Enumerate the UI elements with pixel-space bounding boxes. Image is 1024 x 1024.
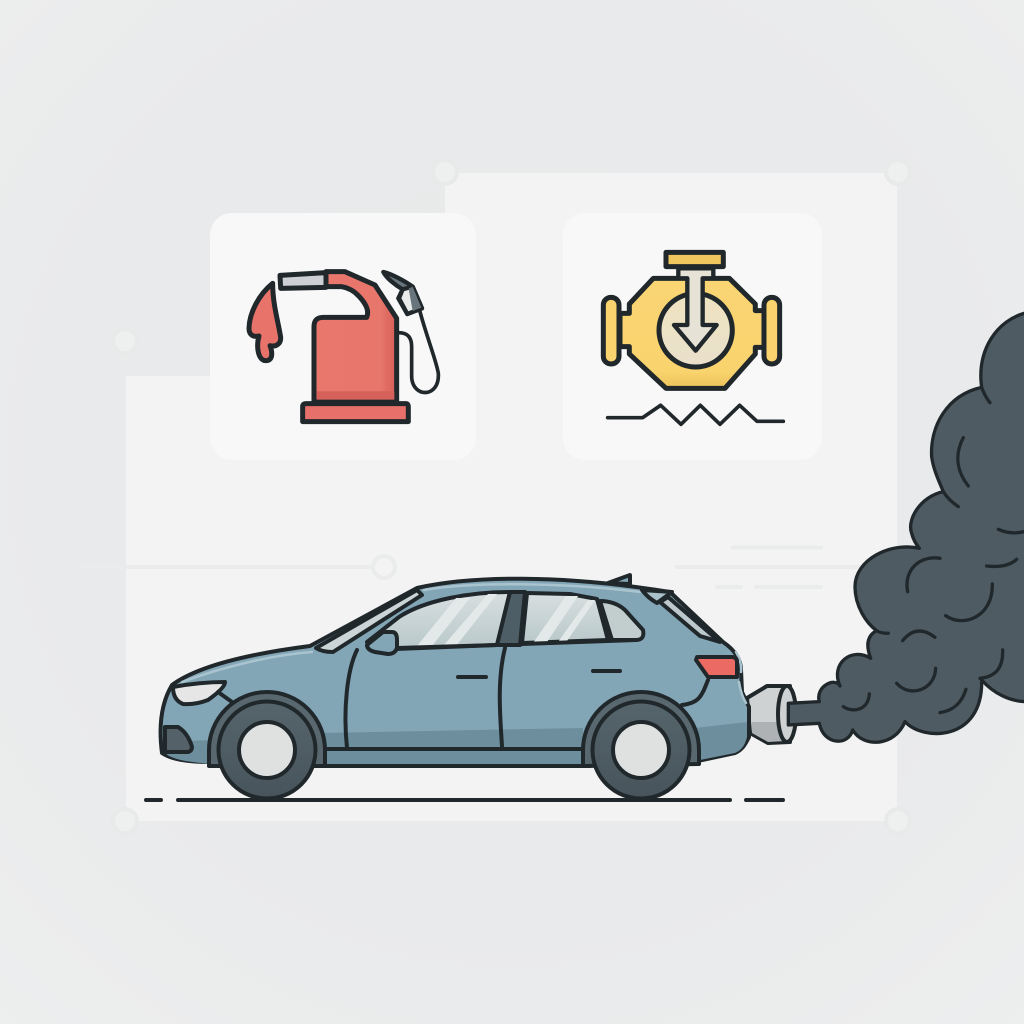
fuel drip [249,283,281,361]
car body [161,579,749,762]
engine cap [666,252,723,267]
side window front [367,592,510,649]
panel: fuel card [210,213,476,460]
corner nodes [113,160,910,833]
gauge disc [659,294,732,367]
grille [165,727,192,752]
nozzle [383,272,422,314]
car [161,575,796,798]
pump spout [280,273,326,288]
window sill line [397,640,636,648]
window streaks front [417,594,497,646]
window streaks rear [533,596,595,643]
hood highlight [182,584,746,703]
rear windshield strip [660,597,720,642]
pump base shade [317,391,394,400]
down arrow [674,268,717,351]
smoke body [788,313,1024,742]
background panel [125,173,897,821]
front wheel [209,692,325,798]
pump body [314,272,397,402]
front door line [345,650,357,748]
icon: fuel pump [249,272,438,422]
icon: engine warning [603,252,783,424]
faint speed lines [82,548,860,587]
roof fin [608,575,630,584]
rear wheel [583,692,699,798]
bottom sill [322,749,590,766]
hose [399,312,438,393]
dark smoke cloud [788,313,1024,742]
ground line [146,798,783,802]
spoiler [642,590,672,603]
pump base [303,404,408,422]
windshield strip [316,590,422,652]
vibration line [608,405,783,424]
tail light [696,657,737,677]
rear door line [500,648,505,746]
panel: engine card [563,213,822,460]
mirror [367,632,397,654]
exhaust muffler [747,686,796,743]
door handles [458,671,620,677]
headlight [173,682,225,704]
right lug [764,297,780,364]
engine block [620,278,767,388]
rear window [522,593,608,643]
lower body shade [165,722,747,764]
quarter window [600,601,643,640]
left lug [603,297,619,364]
pillar [497,592,525,645]
rear arch line [682,680,708,705]
smoke curls [843,387,1024,713]
